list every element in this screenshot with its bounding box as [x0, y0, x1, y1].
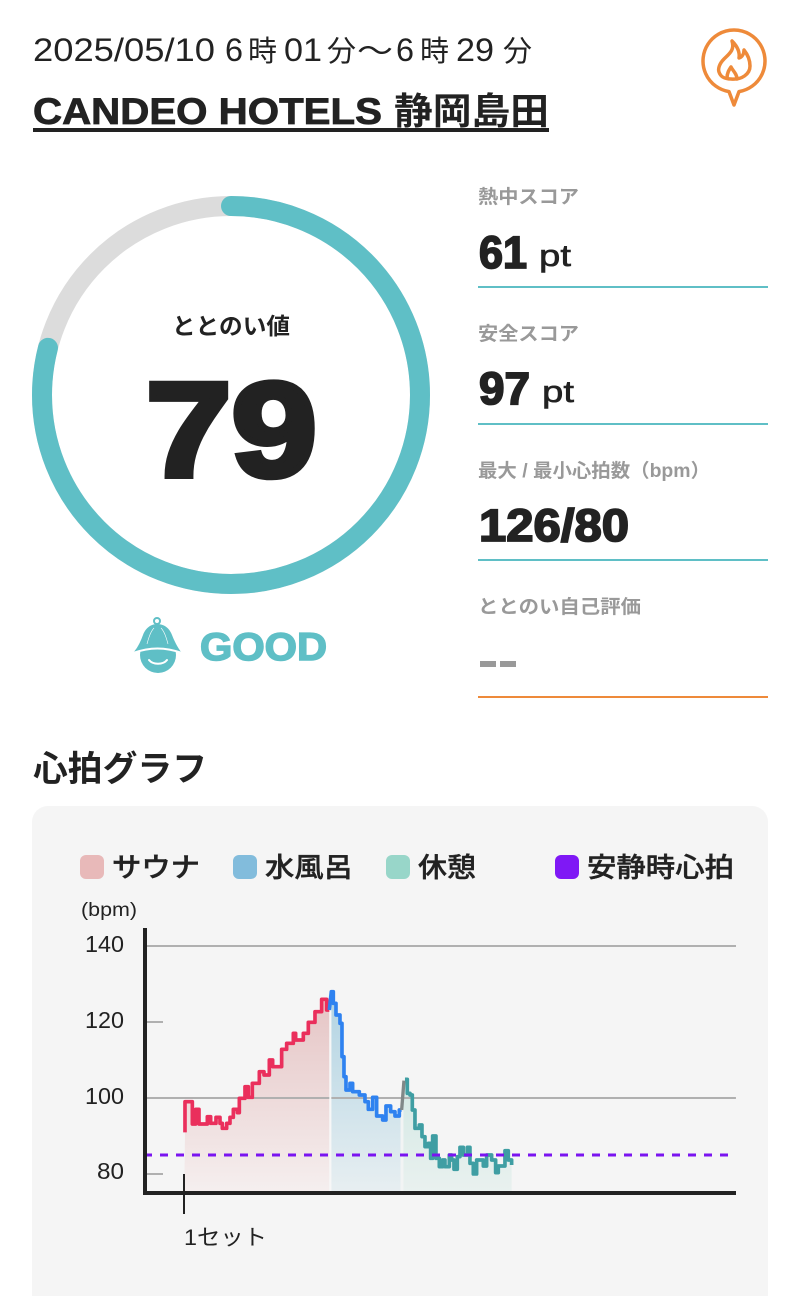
good rating [133, 618, 327, 673]
stat: heat score: pt [539, 238, 571, 273]
icon: sauna hat face [133, 618, 182, 673]
date and time: 〜 [357, 36, 393, 68]
stat: max and min heart rate: 126/80 [479, 500, 629, 551]
y axis labels [81, 900, 137, 1184]
y axis labels: 140 [85, 931, 124, 957]
date and time [33, 32, 532, 68]
date and time: 6 [225, 32, 243, 68]
date and time: 29 [456, 32, 494, 68]
empty value dashes [480, 661, 516, 667]
stat: max and min heart rate [478, 460, 768, 561]
axes [143, 928, 736, 1214]
gridline over fills [145, 1097, 736, 1099]
heart rate chart plot [143, 928, 736, 1250]
section heading: 心拍グラフ [33, 750, 207, 789]
stat: self evaluation [478, 596, 768, 698]
sauna area [184, 999, 329, 1192]
legend: 休憩 [418, 853, 476, 883]
legend: 安静時心拍 [587, 853, 734, 883]
transition line [402, 1081, 404, 1110]
y axis labels: 80 [97, 1158, 124, 1184]
stat: max and min heart rate: 最大 / 最小心拍数（bpm） [478, 460, 710, 482]
y axis labels: (bpm) [81, 900, 137, 921]
stat: safety score: 97 [479, 363, 530, 414]
icon: flame badge [703, 30, 765, 105]
cold bath line [329, 992, 402, 1120]
stat: self evaluation: ととのい自己評価 [478, 596, 641, 618]
date and time: 分 [327, 36, 356, 68]
date and time: 01 [284, 32, 322, 68]
sauna line [185, 999, 329, 1132]
legend: 水風呂 [265, 853, 353, 883]
set label: 1セット [184, 1225, 267, 1250]
stat: safety score: pt [542, 374, 574, 409]
date and time: 6 [396, 32, 414, 68]
date and time: 2025/05/10 [33, 32, 215, 68]
gauge value: 79 [146, 356, 317, 505]
stat: safety score [478, 323, 768, 425]
rest area [403, 1079, 512, 1192]
cold bath area [331, 992, 401, 1192]
legend [80, 853, 734, 883]
date and time: 時 [420, 35, 449, 68]
y axis labels: 120 [85, 1007, 124, 1033]
stat: heat score: 熱中スコア [478, 186, 579, 208]
stat: safety score: 安全スコア [478, 323, 579, 345]
date and time: 時 [248, 35, 277, 68]
panel: heart rate chart [32, 806, 768, 1296]
rating text: GOOD [200, 626, 327, 669]
hotel name heading [33, 91, 549, 132]
legend: サウナ [112, 853, 200, 883]
stat: heat score: 61 [479, 227, 527, 278]
stat: heat score [478, 186, 768, 288]
hotel name heading: CANDEO HOTELS [33, 91, 382, 132]
gauge label: ととのい値 [172, 313, 290, 339]
date and time: 分 [503, 36, 532, 68]
score ring gauge [42, 206, 420, 584]
separators [329, 993, 331, 1192]
resting heart rate line [144, 1154, 736, 1156]
y axis labels: 100 [85, 1083, 124, 1109]
hotel name heading: 静岡島田 [394, 91, 549, 132]
rest line [405, 1079, 512, 1174]
